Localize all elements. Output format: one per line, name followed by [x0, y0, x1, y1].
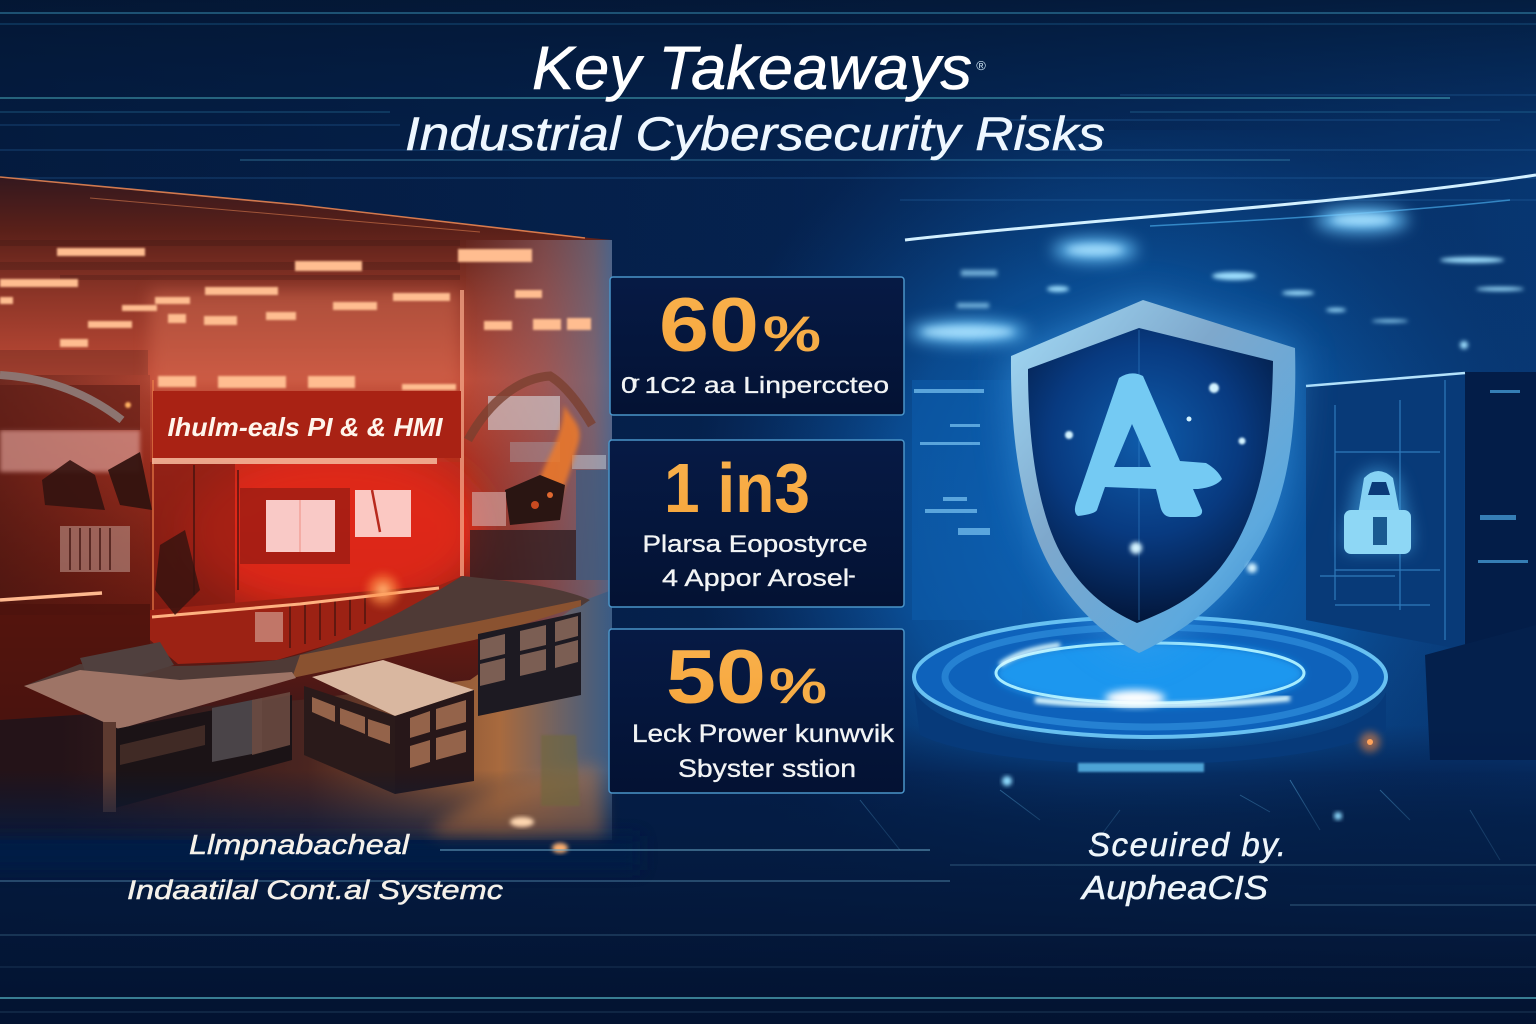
- left hall and ductwork: [0, 375, 150, 724]
- left caption: Llmpnabacheal: [189, 829, 410, 860]
- stat card: 1 in 3: 1 in3: [664, 449, 810, 527]
- scratches: [860, 780, 1500, 860]
- wall haze: [150, 290, 460, 390]
- stat card: 1 in 3: 4 Appor Arosel᠊: [662, 565, 855, 592]
- title: ®: [976, 58, 986, 73]
- stat card: 60%: %: [763, 306, 821, 362]
- red glow behind windows: [185, 445, 485, 615]
- floor glare: [430, 732, 1380, 853]
- left desk surface: [24, 670, 296, 729]
- long counter top: [24, 576, 590, 718]
- rubble: [42, 452, 200, 615]
- raised machine on counter: [80, 642, 174, 690]
- server racks: [1306, 372, 1536, 760]
- stat card: 60%: 0ͬ 1C2 aa Linperccteo: [621, 372, 889, 398]
- ceiling lights: [910, 208, 1524, 349]
- dark bench: [1425, 625, 1536, 760]
- stat card: 50%: [609, 629, 904, 793]
- stat card: 1 in 3: [609, 440, 904, 607]
- right hall: [466, 240, 612, 640]
- bottom fade: [0, 770, 1536, 1024]
- roof lines: [0, 177, 585, 238]
- right caption: Sceuired by.: [1088, 826, 1286, 863]
- stat card: 50%: %: [769, 658, 827, 714]
- back cabinets: [478, 612, 581, 716]
- header frame lines: [0, 13, 1536, 160]
- right caption: AupheaCIS: [1080, 869, 1268, 906]
- stat card: 60%: 60: [659, 283, 759, 368]
- stat card: 1 in 3: Plarsa Eopostyrce: [642, 531, 868, 558]
- subtitle: Industrial Cybersecurity Risks: [405, 107, 1105, 160]
- left caption: Indaatilal Cont.al Systemc: [127, 875, 504, 905]
- workshop floor: [0, 590, 612, 840]
- wall texture bands: [0, 240, 460, 375]
- bottom floor lines: [0, 850, 1536, 1012]
- sparks: [125, 402, 399, 606]
- icon: shield: [1011, 300, 1295, 653]
- small desk: [312, 660, 474, 716]
- stat card: 50%: Leck Prower kunwvik: [632, 720, 895, 748]
- control desks: [24, 576, 590, 812]
- stat card: 50%: 50: [666, 635, 766, 720]
- panel: compromised factory: [0, 177, 612, 840]
- red scene backdrop: [0, 177, 612, 840]
- left desk front: [115, 695, 292, 808]
- scene edge blend: [0, 836, 640, 870]
- stat card: 60%: [610, 277, 904, 415]
- stat card: 50%: Sbyster sstion: [678, 755, 856, 783]
- window glow: [266, 490, 411, 552]
- sparkle dots: [1065, 383, 1257, 573]
- icon: padlock: [1344, 468, 1412, 554]
- banner text: Ihulm-eals PI & & HMI: [168, 412, 443, 442]
- logo letter: [1075, 373, 1222, 517]
- robot arm with fire: [468, 376, 592, 526]
- left data wall: [912, 380, 1022, 620]
- factory building: [150, 290, 462, 664]
- title: Key Takeaways: [532, 34, 972, 102]
- platform rings: [912, 617, 1388, 772]
- right caption: [1080, 826, 1286, 906]
- lower floor shade: [620, 725, 1536, 885]
- ceiling lights: [0, 248, 591, 390]
- left caption: [127, 829, 504, 905]
- label banner: [153, 391, 461, 458]
- blue ceiling streak: [905, 175, 1536, 240]
- panel: protected facility: [620, 175, 1536, 885]
